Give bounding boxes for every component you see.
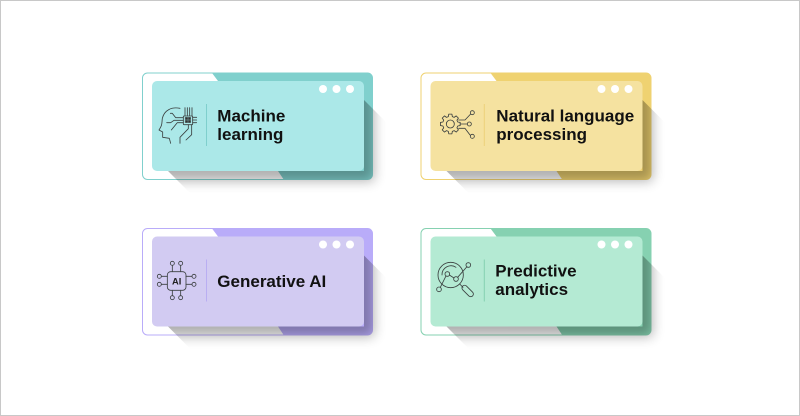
icon: AI chip [157,261,196,300]
card front [152,236,364,326]
icon: magnifier with line chart [437,262,474,298]
card shadow [168,256,381,344]
card back layer [142,228,373,336]
heading: predictive analytics: Predictive [495,262,577,281]
card shadow [446,256,660,344]
card shadow [446,100,660,188]
divider [206,104,208,146]
card front [430,236,642,326]
heading: machine learning: learning [217,125,283,144]
card back layer [421,228,652,336]
divider [483,104,485,146]
divider [206,260,208,302]
icon: gear with circuit nodes [440,111,474,138]
card shadow [168,100,381,188]
window dots [319,85,354,93]
heading: generative AI: Generative AI [217,272,326,291]
window dots [598,240,632,248]
window dots [319,240,354,248]
heading: natural language processing: processing [496,125,587,144]
divider [483,260,485,302]
icon: AI chip: AI [172,276,181,286]
panel: machine learning card [130,70,374,181]
panel: generative AI card [130,226,374,336]
panel: predictive analytics card [408,226,652,336]
card front [152,81,364,171]
card front [430,81,642,171]
heading: machine learning: Machine [217,107,285,126]
heading: predictive analytics: analytics [495,280,568,299]
card back layer [421,73,652,180]
heading: natural language processing: Natural language [496,107,634,126]
card back layer [142,73,373,180]
panel: natural language processing card [408,70,652,181]
window dots [598,85,632,93]
icon: AI head with chip [159,108,197,143]
